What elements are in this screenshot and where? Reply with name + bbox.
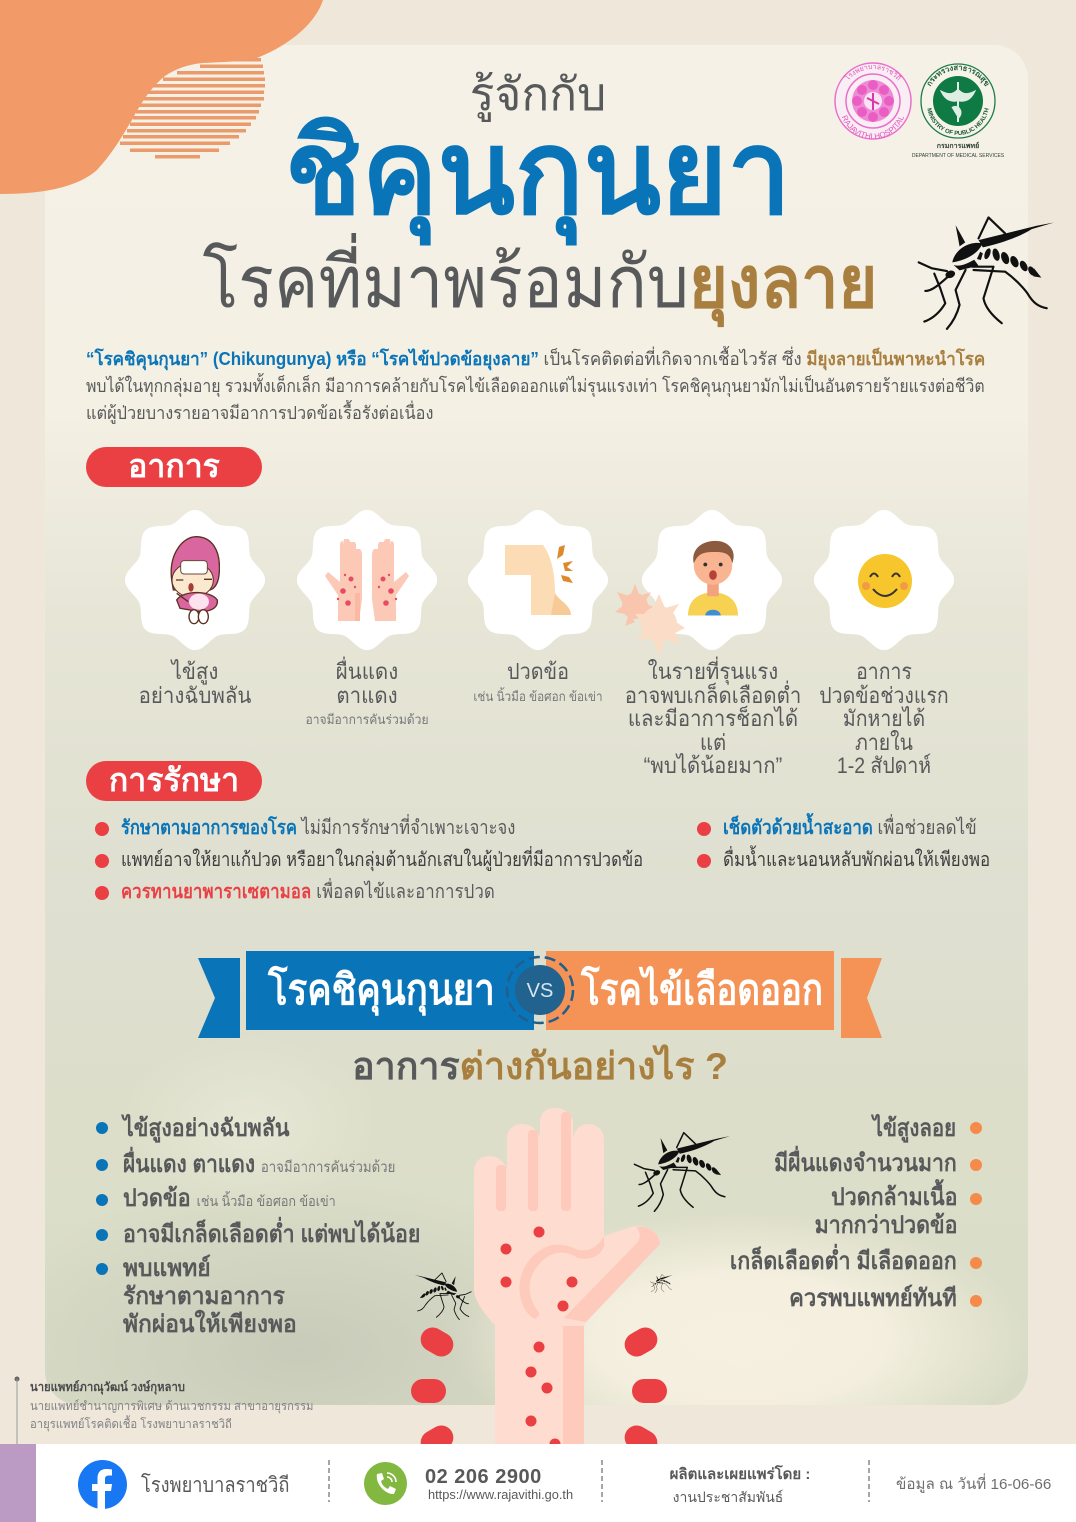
- bullet: [96, 1229, 108, 1241]
- rash dots: [500, 1226, 578, 1450]
- credit text: [30, 1378, 313, 1434]
- intro line 2: พบได้ในทุกกลุ่มอายุ รวมทั้งเด็กเล็ก มีอาการคล้ายกับโรคไข้เลือดออกแต่ไม่รุนแรงเท่า โรคชิคุนกุนยามักไม่เป็นอันตรายร้ายแรงต่อชีวิต: [86, 376, 985, 396]
- symptom 3: joint pain: [468, 510, 608, 650]
- facebook page name: โรงพยาบาลราชวิถี: [141, 1474, 289, 1497]
- footer: [0, 1444, 1076, 1522]
- red pills: [411, 1323, 667, 1459]
- producer: ผลิตและเผยแพร่โดย :: [670, 1466, 810, 1483]
- bullet: [96, 1159, 108, 1171]
- treatment text: แพทย์อาจให้ยาแก้ปวด หรือยาในกลุ่มต้านอักเสบในผู้ป่วยที่มีอาการปวดข้อ: [121, 849, 643, 871]
- title line 2: ชิคุนกุนยา: [285, 107, 791, 239]
- title line 3: โรคที่มาพร้อมกับยุงลาย: [203, 243, 877, 323]
- flower badge: [468, 510, 608, 650]
- blue panel: [246, 951, 534, 1030]
- treatment text: เช็ดตัวด้วยน้ำสะอาด เพื่อช่วยลดไข้: [723, 817, 977, 839]
- item: เกล็ดเลือดต่ำ มีเลือดออก: [730, 1248, 957, 1275]
- chikungunya list: [96, 1114, 420, 1338]
- item: รักษาตามอาการ: [123, 1283, 285, 1310]
- icon: virus particles: [615, 584, 685, 656]
- icon: mosquito left of hand: [414, 1272, 472, 1320]
- intro line 3: แต่ผู้ป่วยบางรายอาจมีอาการปวดข้อเรื้อรังต่อเนื่อง: [86, 403, 433, 423]
- credit line: [14, 1376, 20, 1444]
- label: rash: ตาแดง: [336, 683, 398, 708]
- label: joint pain: เช่น นิ้วมือ ข้อศอก ข้อเข่า: [473, 689, 603, 704]
- icon: man with shocked face: [688, 540, 738, 616]
- hand: [474, 1108, 660, 1444]
- symptom 4: severe cases: [615, 510, 782, 656]
- heading: treatment: [86, 761, 262, 801]
- treatment text: [121, 814, 643, 903]
- treatment text: ดื่มน้ำและนอนหลับพักผ่อนให้เพียงพอ: [723, 849, 990, 871]
- heading: symptoms: [86, 447, 262, 487]
- bullet: [96, 1263, 108, 1275]
- symptom 5: pain subsides: [814, 510, 954, 650]
- blue panel label: โรคชิคุนกุนยา: [268, 966, 495, 1013]
- icon: large mosquito: [918, 216, 1054, 330]
- treatment text: [723, 813, 990, 871]
- flower badge: [814, 510, 954, 650]
- treatment text: รักษาตามอาการของโรค ไม่มีการรักษาที่จำเพาะเจาะจง: [121, 817, 515, 839]
- label: pain subsides: 1-2 สัปดาห์: [837, 753, 931, 778]
- label: pain subsides: ปวดข้อช่วงแรก: [819, 682, 949, 708]
- item: ปวดข้อ เช่น นิ้วมือ ข้อศอก ข้อเข่า: [123, 1185, 336, 1212]
- treatment text: ควรทานยาพาราเซตามอล เพื่อลดไข้และอาการปวด: [121, 881, 495, 903]
- logo: Ministry of Public Health: MINISTRY OF PUBLIC HEALTH: [927, 108, 989, 135]
- logo: Ministry of Public Health: กระทรวงสาธารณสุข: [928, 65, 989, 86]
- treatment list right: [697, 813, 990, 871]
- label: rash: [305, 656, 429, 727]
- flower badge: [125, 510, 265, 650]
- logo: Rajavithi Hospital: [834, 62, 912, 140]
- bullet: [95, 854, 109, 868]
- heading: symptoms: อาการ: [128, 448, 220, 484]
- icon: hands with rash: [325, 539, 409, 621]
- title line 1: รู้จักกับ: [470, 68, 606, 120]
- comparison subheading: อาการต่างกันอย่างไร ?: [352, 1045, 728, 1087]
- item: พักผ่อนให้เพียงพอ: [123, 1311, 297, 1338]
- decorative stripes: [120, 58, 265, 158]
- symptom 1: high fever: [125, 510, 265, 650]
- bullet: [96, 1194, 108, 1206]
- label: pain subsides: อาการ: [856, 659, 912, 684]
- credit text: นายแพทย์ภาณุวัฒน์ วงษ์กุหลาบ: [30, 1380, 185, 1394]
- symptom 2: rash: [297, 510, 437, 650]
- label: severe cases: อาจพบเกล็ดเลือดต่ำ: [625, 682, 801, 708]
- item: พบแพทย์: [123, 1255, 211, 1282]
- label: severe cases: และมีอาการช็อกได้: [628, 706, 798, 731]
- item: ผื่นแดง ตาแดง อาจมีอาการคันร่วมด้วย: [123, 1151, 395, 1178]
- hand illustration with rash: [400, 1100, 680, 1444]
- label: pain subsides: ภายใน: [855, 730, 913, 754]
- ribbon tails: [198, 958, 882, 1038]
- icon: facebook: [78, 1460, 127, 1509]
- bullet: [96, 1122, 108, 1134]
- label: severe cases: “พบได้น้อยมาก”: [644, 753, 782, 778]
- orange panel label: โรคไข้เลือดออก: [581, 966, 823, 1013]
- icon: mosquito right of hand: [633, 1131, 731, 1212]
- icon: sick girl: [170, 536, 220, 624]
- item: มากกว่าปวดข้อ: [814, 1212, 957, 1239]
- purple bar: [0, 1444, 36, 1522]
- credit text: อายุรแพทย์โรคติดเชื้อ โรงพยาบาลราชวิถี: [30, 1417, 232, 1431]
- item: ปวดกล้ามเนื้อ: [831, 1184, 957, 1211]
- bullet: [95, 886, 109, 900]
- label: rash: ผื่นแดง: [336, 659, 398, 684]
- flower badge: [297, 510, 437, 650]
- heading: treatment: การรักษา: [109, 762, 239, 798]
- producer: [655, 1464, 825, 1509]
- label: pain subsides: มักหายได้: [843, 706, 925, 731]
- bullet: [970, 1193, 982, 1205]
- label: high fever: อย่างฉับพลัน: [139, 683, 251, 708]
- item: ไข้สูงอย่างฉับพลัน: [123, 1115, 289, 1142]
- intro paragraph: [86, 346, 985, 424]
- flower badge: [642, 510, 782, 650]
- VS badge: [506, 956, 574, 1024]
- bullet: [970, 1122, 982, 1134]
- VS badge: VS: [527, 980, 553, 1002]
- icon: smiley face: [858, 554, 912, 608]
- item: ควรพบแพทย์ทันที: [789, 1285, 957, 1312]
- item: อาจมีเกล็ดเลือดต่ำ แต่พบได้น้อย: [123, 1221, 420, 1248]
- bullet: [970, 1257, 982, 1269]
- label: joint pain: [473, 659, 603, 704]
- label: severe cases: แต่: [700, 730, 726, 754]
- bullet: [970, 1295, 982, 1307]
- website: https://www.rajavithi.go.th: [428, 1487, 573, 1502]
- label: high fever: ไข้สูง: [172, 659, 218, 684]
- item: [814, 1184, 957, 1240]
- label: high fever: [139, 659, 251, 708]
- producer: งานประชาสัมพันธ์: [673, 1489, 783, 1505]
- label: rash: อาจมีอาการคันร่วมด้วย: [305, 712, 429, 727]
- dengue list: [700, 1110, 990, 1320]
- logo: Rajavithi Hospital: RAJAVITHI HOSPITAL: [842, 115, 904, 139]
- item: มีผื่นแดงจำนวนมาก: [774, 1150, 957, 1177]
- orange panel: [546, 951, 834, 1030]
- label: severe cases: ในรายที่รุนแรง: [648, 659, 778, 684]
- icon: phone: [364, 1462, 407, 1505]
- logo: Ministry of Public Health: [920, 63, 996, 139]
- item: ไข้สูงลอย: [873, 1115, 956, 1142]
- logo caption: DEPARTMENT OF MEDICAL SERVICES: [912, 153, 1004, 159]
- bullet: [697, 854, 711, 868]
- phone number: 02 206 2900: [425, 1466, 542, 1488]
- item: [123, 1255, 297, 1339]
- credit text: นายแพทย์ชำนาญการพิเศษ ด้านเวชกรรม สาขาอายุรกรรม: [30, 1398, 313, 1412]
- treatment list left: [95, 814, 643, 903]
- logo caption: กรมการแพทย์: [937, 143, 979, 150]
- icon: bent knee: [505, 545, 573, 615]
- author credit: [14, 1376, 324, 1444]
- orange corner blob: [0, 0, 323, 194]
- versus banner: [198, 951, 882, 1038]
- data date: ข้อมูล ณ วันที่ 16-06-66: [896, 1476, 1051, 1493]
- icon: tiny mosquito: [650, 1274, 673, 1293]
- bullet: [95, 822, 109, 836]
- logo: Rajavithi Hospital: โรงพยาบาลราชวิถี: [844, 65, 902, 80]
- label: joint pain: ปวดข้อ: [507, 659, 569, 684]
- bullet: [970, 1159, 982, 1171]
- label: pain subsides: [819, 659, 949, 778]
- intro line 1: “โรคชิคุนกุนยา” (Chikungunya) หรือ “โรคไข้ปวดข้อยุงลาย” เป็นโรคติดต่อที่เกิดจากเชื้อไวรัส ซึ่ง มียุงลายเป็นพาหะนำโรค: [86, 349, 985, 369]
- logo caption: [912, 142, 1004, 159]
- bullet: [697, 822, 711, 836]
- label: severe cases: [625, 656, 801, 778]
